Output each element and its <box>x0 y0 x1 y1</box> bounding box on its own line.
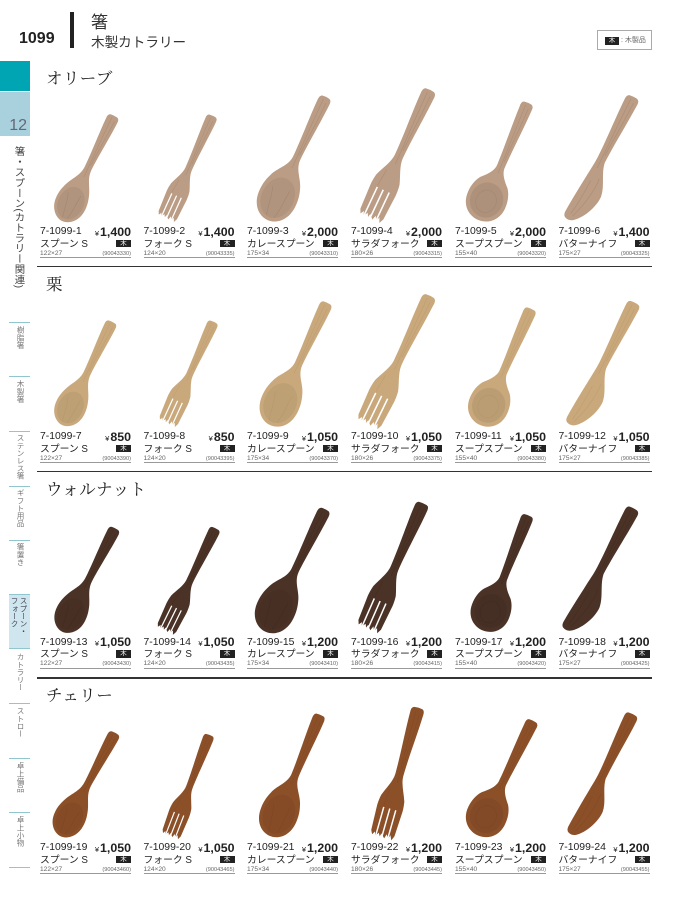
page number: 1099 <box>19 30 55 47</box>
product text: フォーク S <box>144 854 192 866</box>
icon: spoon <box>54 114 118 222</box>
product text: 175×27 <box>558 866 581 872</box>
product text: ¥1,050 <box>613 430 650 444</box>
product text: 122×27 <box>40 250 62 256</box>
title: 箸 <box>91 13 108 32</box>
product text: ¥2,000 <box>510 224 546 238</box>
tab label: ストロー <box>16 707 25 737</box>
icon: curry spoon <box>254 508 330 634</box>
product text: スプーン S <box>40 649 88 660</box>
product text: 7-1099-4 <box>351 226 393 237</box>
product 7-1099-21 <box>247 706 338 876</box>
sidebar: tab ステンレス箸 <box>9 431 30 432</box>
product text: 180×26 <box>351 454 373 462</box>
product text: 木 <box>224 856 230 862</box>
product text: ¥1,200 <box>406 635 442 649</box>
product text: サラダフォーク <box>351 238 420 250</box>
product text: (90043385) <box>621 456 650 462</box>
product text: スプーン S <box>40 238 88 250</box>
product text: 7-1099-5 <box>455 226 497 237</box>
product text: 木 <box>224 240 230 246</box>
subtitle: 木製カトラリー <box>91 34 186 50</box>
product text <box>40 225 131 258</box>
product text: 木 <box>431 856 438 862</box>
product text: ¥1,400 <box>95 224 131 238</box>
product 7-1099-5 <box>455 102 546 258</box>
product 7-1099-10 <box>351 294 442 463</box>
product 7-1099-9 <box>247 301 338 463</box>
product text: ¥1,050 <box>95 635 131 649</box>
product 7-1099-2 <box>144 114 235 258</box>
product text: 7-1099-21 <box>247 842 294 853</box>
icon: butter knife <box>564 95 638 220</box>
product text: (90043370) <box>309 456 338 462</box>
product text: 7-1099-7 <box>40 431 82 442</box>
product text: 木 <box>535 650 542 657</box>
product text: 180×26 <box>351 660 373 667</box>
product text: ¥2,000 <box>302 224 338 238</box>
product text: 7-1099-9 <box>247 431 289 442</box>
product text <box>144 636 234 668</box>
product text: ¥850 <box>105 430 131 444</box>
product text: (90043395) <box>206 456 234 462</box>
product text: 木 <box>120 240 127 246</box>
legend tag: 木 <box>609 37 615 44</box>
product text <box>455 225 546 258</box>
product text: 175×34 <box>247 866 269 872</box>
icon: curry spoon <box>256 96 330 222</box>
product text: スープスプーン <box>455 444 523 454</box>
product text: (90043315) <box>413 250 442 256</box>
section heading: walnut: ウォルナット <box>46 480 146 498</box>
product text: (90043330) <box>102 250 131 256</box>
icon: fork <box>162 734 214 840</box>
product 7-1099-15 <box>247 508 338 669</box>
product 7-1099-4 <box>351 88 442 258</box>
product text: (90043325) <box>621 250 650 256</box>
product text: 7-1099-15 <box>247 636 294 648</box>
sidebar: tab 木製箸 <box>9 376 30 377</box>
section heading: chestnut: 栗 <box>46 274 63 294</box>
product text: (90043390) <box>102 456 131 462</box>
product text: 124×20 <box>144 250 166 256</box>
product text: (90043430) <box>102 661 131 667</box>
sidebar: tab 樹脂箸 <box>9 322 30 323</box>
product text <box>144 841 234 874</box>
product text <box>247 841 338 874</box>
product text: カレースプーン <box>247 649 315 660</box>
product text: 木 <box>431 240 438 246</box>
product text: 7-1099-13 <box>40 636 87 648</box>
sidebar: active tab スプーン・フォーク: スプーン・ <box>19 597 28 635</box>
icon: soup spoon <box>470 514 533 632</box>
product text: 7-1099-12 <box>558 431 606 442</box>
product text: (90043460) <box>102 866 131 872</box>
icon: fork <box>158 114 217 222</box>
product text: スプーン S <box>40 444 88 454</box>
product 7-1099-20 <box>144 734 235 874</box>
sidebar: tab 卓上小物 <box>9 812 30 813</box>
product text: 木 <box>120 856 127 862</box>
product text: (90043335) <box>206 250 234 256</box>
product text: 180×26 <box>351 250 373 256</box>
sidebar: active tab スプーン・フォーク: フォーク <box>10 597 19 627</box>
product 7-1099-1 <box>40 114 131 258</box>
product text: (90043455) <box>621 866 650 872</box>
sidebar: tab ギフト用品 <box>9 486 30 487</box>
sidebar: chapter number: 12 <box>9 117 27 134</box>
product text: ¥1,400 <box>198 224 234 238</box>
product text: サラダフォーク <box>351 444 420 454</box>
product text: 175×27 <box>558 250 581 256</box>
product text: 7-1099-23 <box>455 842 502 853</box>
product text: 155×40 <box>455 660 477 667</box>
product text: (90043465) <box>206 866 234 872</box>
product text: 7-1099-10 <box>351 431 398 442</box>
product text: ¥1,050 <box>95 840 131 854</box>
tab label: 木製箸 <box>16 380 25 403</box>
product text: (90043450) <box>517 866 546 872</box>
product text: スプーン S <box>40 854 88 866</box>
icon: spoon <box>54 526 120 633</box>
product text: (90043310) <box>309 250 338 256</box>
product text: サラダフォーク <box>351 854 420 866</box>
product text: 7-1099-24 <box>558 842 606 853</box>
product text: 木 <box>639 856 645 862</box>
icon: soup spoon <box>468 307 536 427</box>
icon: salad fork <box>351 706 442 841</box>
product text: 122×27 <box>40 454 62 462</box>
product text: 木 <box>327 856 334 862</box>
legend text: : 木製品 <box>621 36 646 44</box>
product text: ¥1,200 <box>510 635 546 649</box>
section heading: olive: オリーブ <box>46 68 113 88</box>
product text <box>455 841 546 874</box>
sidebar: teal block <box>0 61 30 91</box>
product text: ¥1,050 <box>198 840 234 854</box>
product text: ¥1,200 <box>406 840 442 854</box>
tab label: 卓上備品 <box>16 762 25 792</box>
product text <box>40 841 131 874</box>
product text: ¥1,400 <box>613 224 650 238</box>
product text: ¥1,050 <box>406 430 442 444</box>
product text: 175×34 <box>247 250 269 256</box>
product text: サラダフォーク <box>351 649 420 660</box>
product text <box>351 430 442 463</box>
product text: ¥1,050 <box>198 635 234 649</box>
product text: 木 <box>327 240 334 246</box>
product text: 175×34 <box>247 454 269 462</box>
product text: 木 <box>224 650 230 657</box>
product 7-1099-24 <box>558 706 650 876</box>
icon: spoon <box>52 731 120 838</box>
product text <box>247 636 338 668</box>
sidebar: chapter title: 箸・スプーン(カトラリー関連) <box>12 146 24 288</box>
product text <box>558 225 650 258</box>
icon: fork <box>160 320 218 427</box>
product text <box>40 430 131 463</box>
legend tag <box>605 37 619 44</box>
product text <box>40 636 131 668</box>
product 7-1099-22 <box>351 706 442 876</box>
icon: salad fork <box>358 502 428 634</box>
product text: 7-1099-18 <box>558 636 606 648</box>
product text: ¥1,200 <box>510 840 546 854</box>
product 7-1099-14 <box>144 526 235 669</box>
product 7-1099-7 <box>40 320 131 463</box>
product text: ¥1,050 <box>510 430 546 444</box>
icon: salad fork <box>360 88 435 223</box>
product text: 木 <box>431 444 438 452</box>
product 7-1099-12 <box>558 300 650 463</box>
tab label: 卓上小物 <box>16 816 25 846</box>
tab label: 箸置き <box>16 543 25 566</box>
header bar <box>70 12 74 48</box>
product text: 7-1099-22 <box>351 842 398 853</box>
product text: (90043435) <box>206 661 234 667</box>
tab label: 樹脂箸 <box>16 326 25 349</box>
product text <box>247 430 338 463</box>
product text: 175×27 <box>558 660 581 667</box>
product text: 122×27 <box>40 660 62 667</box>
product text: (90043445) <box>413 866 442 872</box>
product text: フォーク S <box>144 238 192 250</box>
tab label: ステンレス箸 <box>16 434 25 480</box>
product 7-1099-17 <box>455 514 546 669</box>
product text: (90043440) <box>309 866 338 872</box>
product 7-1099-6 <box>558 95 650 258</box>
product text: 木 <box>224 444 230 452</box>
sidebar: tab 卓上備品 <box>9 758 30 759</box>
product text: 木 <box>535 444 542 452</box>
product text: 175×27 <box>558 454 581 462</box>
icon: butter knife <box>558 706 650 841</box>
product text: 木 <box>535 240 542 246</box>
product text: フォーク S <box>144 649 192 660</box>
sidebar: tab ストロー <box>9 703 30 704</box>
icon: curry spoon <box>247 706 338 841</box>
product text: 7-1099-1 <box>40 226 82 237</box>
product text <box>455 636 546 668</box>
product text: 木 <box>639 240 645 246</box>
icon: soup spoon <box>455 706 546 841</box>
product text: フォーク S <box>144 444 192 454</box>
product text: 7-1099-20 <box>144 842 191 853</box>
product text: ¥1,200 <box>613 635 650 649</box>
product text: 7-1099-11 <box>455 431 502 442</box>
product text: 7-1099-3 <box>247 226 289 237</box>
product text: バターナイフ <box>558 238 617 250</box>
product text: ¥1,200 <box>302 840 338 854</box>
product text: 木 <box>327 444 334 452</box>
product text <box>351 841 442 874</box>
sidebar: chapter number <box>0 92 30 136</box>
product text: 木 <box>535 856 542 862</box>
icon: butter knife <box>562 506 638 631</box>
product text: (90043375) <box>413 456 442 462</box>
product text: ¥850 <box>209 430 234 444</box>
product 7-1099-3 <box>247 96 338 258</box>
product text <box>558 841 650 874</box>
product text: 7-1099-8 <box>144 431 185 442</box>
product text: 7-1099-19 <box>40 842 87 853</box>
product text: 124×20 <box>144 454 166 462</box>
product text <box>351 636 442 668</box>
product 7-1099-8 <box>144 320 235 463</box>
product text: (90043420) <box>517 661 546 667</box>
product 7-1099-23 <box>455 706 546 876</box>
product 7-1099-16 <box>351 502 442 669</box>
product text: (90043380) <box>517 456 546 462</box>
product text: ¥1,050 <box>302 430 338 444</box>
product text: 7-1099-16 <box>351 636 398 648</box>
sidebar: tab 箸置き <box>9 540 30 541</box>
product text: 155×40 <box>455 866 477 872</box>
product text: スープスプーン <box>455 649 523 660</box>
product text <box>455 430 546 463</box>
product text: ¥1,200 <box>613 840 650 854</box>
icon: curry spoon <box>260 301 332 427</box>
section heading: cherry: チェリー <box>46 686 113 704</box>
product text <box>144 225 234 258</box>
product text: スープスプーン <box>455 854 523 866</box>
product text <box>144 430 234 463</box>
product text: 木 <box>431 650 438 657</box>
product text: (90043425) <box>621 661 650 667</box>
icon: salad fork <box>358 294 435 430</box>
product text <box>558 636 650 668</box>
product text: 7-1099-17 <box>455 636 502 648</box>
product text: 木 <box>120 650 127 657</box>
legend: material <box>597 30 652 50</box>
sidebar: tab カトラリー: カトラリー <box>16 653 25 691</box>
product text: ¥1,200 <box>302 635 338 649</box>
product text: 木 <box>639 650 645 657</box>
product text <box>558 430 650 463</box>
product text: 木 <box>327 650 334 657</box>
product text: 木 <box>120 444 127 452</box>
product text: (90043320) <box>517 250 546 256</box>
product text: スープスプーン <box>455 238 523 250</box>
product text: 122×27 <box>40 866 62 872</box>
product text: 155×40 <box>455 250 477 256</box>
tab label: ギフト用品 <box>16 489 25 527</box>
product text: (90043410) <box>309 661 338 667</box>
product text <box>351 225 442 258</box>
product text: 180×26 <box>351 866 373 872</box>
product text: 7-1099-6 <box>558 226 600 237</box>
product text: (90043415) <box>413 661 442 667</box>
sidebar: active tab スプーン・フォーク <box>9 594 30 649</box>
product 7-1099-18 <box>558 506 650 669</box>
product text: 7-1099-14 <box>144 636 191 648</box>
product text: 124×20 <box>144 660 166 667</box>
product text: 175×34 <box>247 660 269 667</box>
icon: fork <box>158 526 220 635</box>
product text: バターナイフ <box>558 854 617 866</box>
product 7-1099-11 <box>455 307 546 463</box>
icon: spoon <box>54 320 116 426</box>
icon: soup spoon <box>466 102 533 222</box>
icon: butter knife <box>566 300 640 426</box>
product 7-1099-19 <box>40 731 131 874</box>
product 7-1099-13 <box>40 526 131 669</box>
product text: バターナイフ <box>558 444 617 454</box>
product text: カレースプーン <box>247 854 315 866</box>
product text: 155×40 <box>455 454 477 462</box>
product text: バターナイフ <box>558 649 617 660</box>
product text <box>247 225 338 258</box>
product text: 7-1099-2 <box>144 226 185 237</box>
product text: カレースプーン <box>247 238 315 250</box>
product text: カレースプーン <box>247 444 315 454</box>
product text: 124×20 <box>144 866 166 872</box>
product text: 木 <box>639 444 645 452</box>
product text: ¥2,000 <box>406 224 442 238</box>
